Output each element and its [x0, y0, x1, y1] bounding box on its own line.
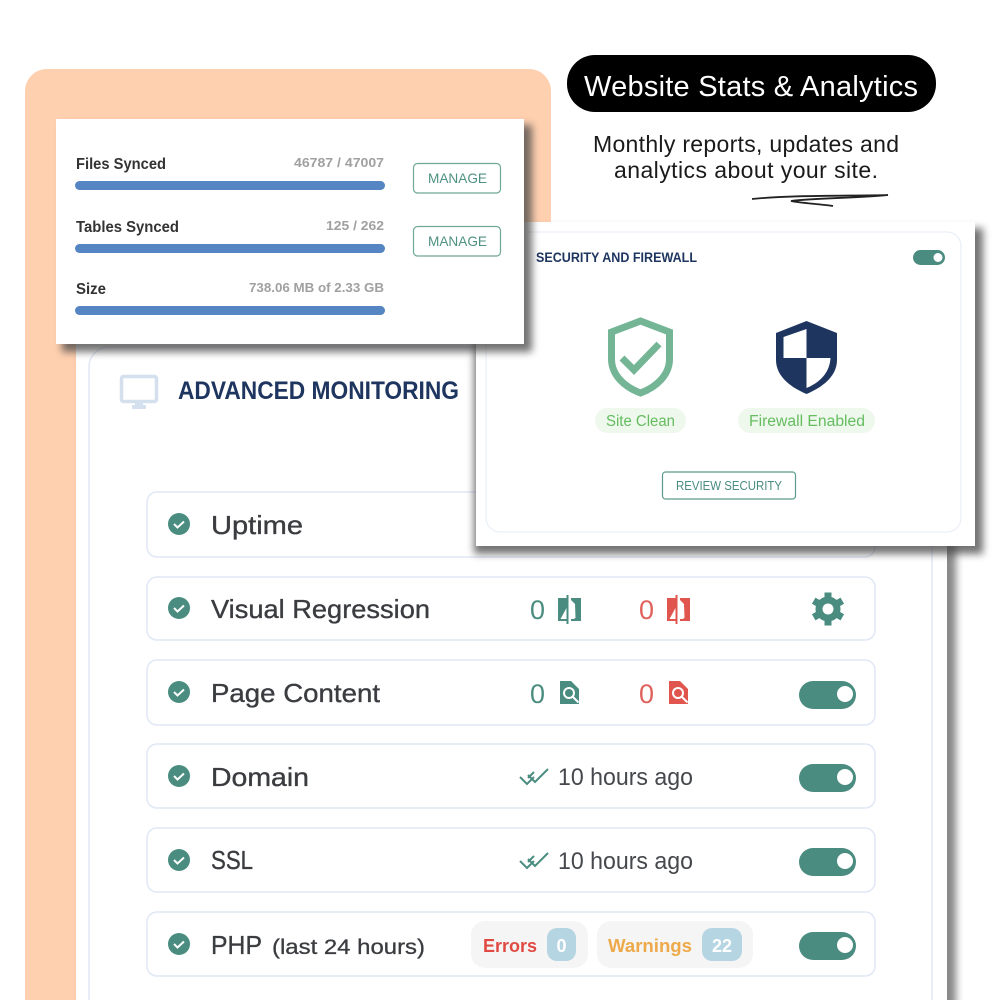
- row: php: [147, 912, 875, 976]
- row: page content: 0: [639, 679, 654, 709]
- warnings badge: [597, 921, 753, 968]
- icon: page search green: [560, 681, 579, 704]
- stat: size: 738.06 MB of 2.33 GB: [249, 280, 384, 295]
- panel: security and firewall: [474, 222, 983, 554]
- warnings badge: 22: [712, 936, 732, 956]
- row: visual regression: [147, 577, 875, 640]
- title pill: [567, 55, 936, 112]
- icon: green shield: [612, 321, 670, 393]
- row: domain: 10 hours ago: [558, 764, 693, 791]
- row: php: PHP: [211, 930, 262, 960]
- button: manage tables: [414, 226, 500, 256]
- scribble underline: [752, 195, 888, 206]
- warnings badge: Warnings: [608, 936, 692, 956]
- label: site clean: Site Clean: [606, 413, 675, 430]
- label: firewall enabled: Firewall Enabled: [749, 413, 865, 430]
- icon: navy shield: [776, 321, 837, 394]
- errors badge: [471, 921, 588, 968]
- heading: security and firewall: SECURITY AND FIREWALL: [536, 250, 697, 265]
- stat: tables synced: [75, 218, 385, 253]
- stat: tables synced: 125 / 262: [326, 218, 384, 233]
- toggle: [799, 681, 856, 709]
- button: review security: [662, 472, 796, 499]
- label: site clean: [595, 408, 686, 433]
- row: visual regression: 0: [639, 595, 654, 625]
- errors badge: 0: [556, 936, 567, 956]
- label: firewall enabled: [738, 408, 875, 433]
- row: ssl: [147, 828, 875, 892]
- stat: files synced: Files Synced: [76, 156, 166, 173]
- button: review security: REVIEW SECURITY: [676, 479, 783, 493]
- title pill: Website Stats & Analytics: [584, 71, 918, 103]
- stat: size: [75, 280, 385, 315]
- row: domain: [147, 744, 875, 808]
- icon: gear: [814, 592, 842, 626]
- stat: size: Size: [76, 281, 106, 298]
- toggle: [799, 932, 856, 960]
- row: php: (last 24 hours): [272, 936, 425, 959]
- toggle: [913, 250, 945, 265]
- toggle: [799, 848, 856, 876]
- row: uptime: [147, 492, 875, 557]
- description text: [593, 131, 899, 183]
- row: page content: 0: [530, 679, 545, 709]
- button: manage files: [414, 164, 500, 193]
- stat: files synced: 46787 / 47007: [294, 155, 384, 170]
- description text: analytics about your site.: [614, 157, 878, 183]
- peach background panel: [25, 69, 551, 1000]
- icon: compare red: [667, 595, 690, 624]
- stat: files synced: [75, 155, 385, 190]
- toggle: [799, 764, 856, 792]
- row: page content: Page Content: [211, 678, 381, 708]
- row: domain: Domain: [211, 762, 309, 792]
- stat: tables synced: Tables Synced: [76, 219, 179, 236]
- button: manage files: MANAGE: [428, 170, 487, 186]
- row: uptime: Uptime: [211, 510, 303, 540]
- description text: Monthly reports, updates and: [593, 131, 899, 157]
- icon: compare green: [558, 595, 581, 624]
- row: page content: [147, 660, 875, 725]
- row: ssl: 10 hours ago: [558, 848, 693, 875]
- icon: double check: [520, 853, 548, 868]
- icon: double check: [520, 769, 548, 784]
- heading: advanced monitoring: ADVANCED MONITORING: [178, 377, 459, 405]
- panel: advanced monitoring: [76, 340, 956, 1000]
- row: ssl: SSL: [211, 845, 253, 875]
- row: visual regression: 0: [530, 595, 545, 625]
- button: manage tables: MANAGE: [428, 233, 487, 249]
- icon: page search red: [669, 681, 688, 704]
- errors badge: Errors: [483, 936, 537, 956]
- icon: monitor: [122, 376, 156, 409]
- row: visual regression: Visual Regression: [211, 594, 430, 624]
- panel: sync stats: [56, 119, 532, 352]
